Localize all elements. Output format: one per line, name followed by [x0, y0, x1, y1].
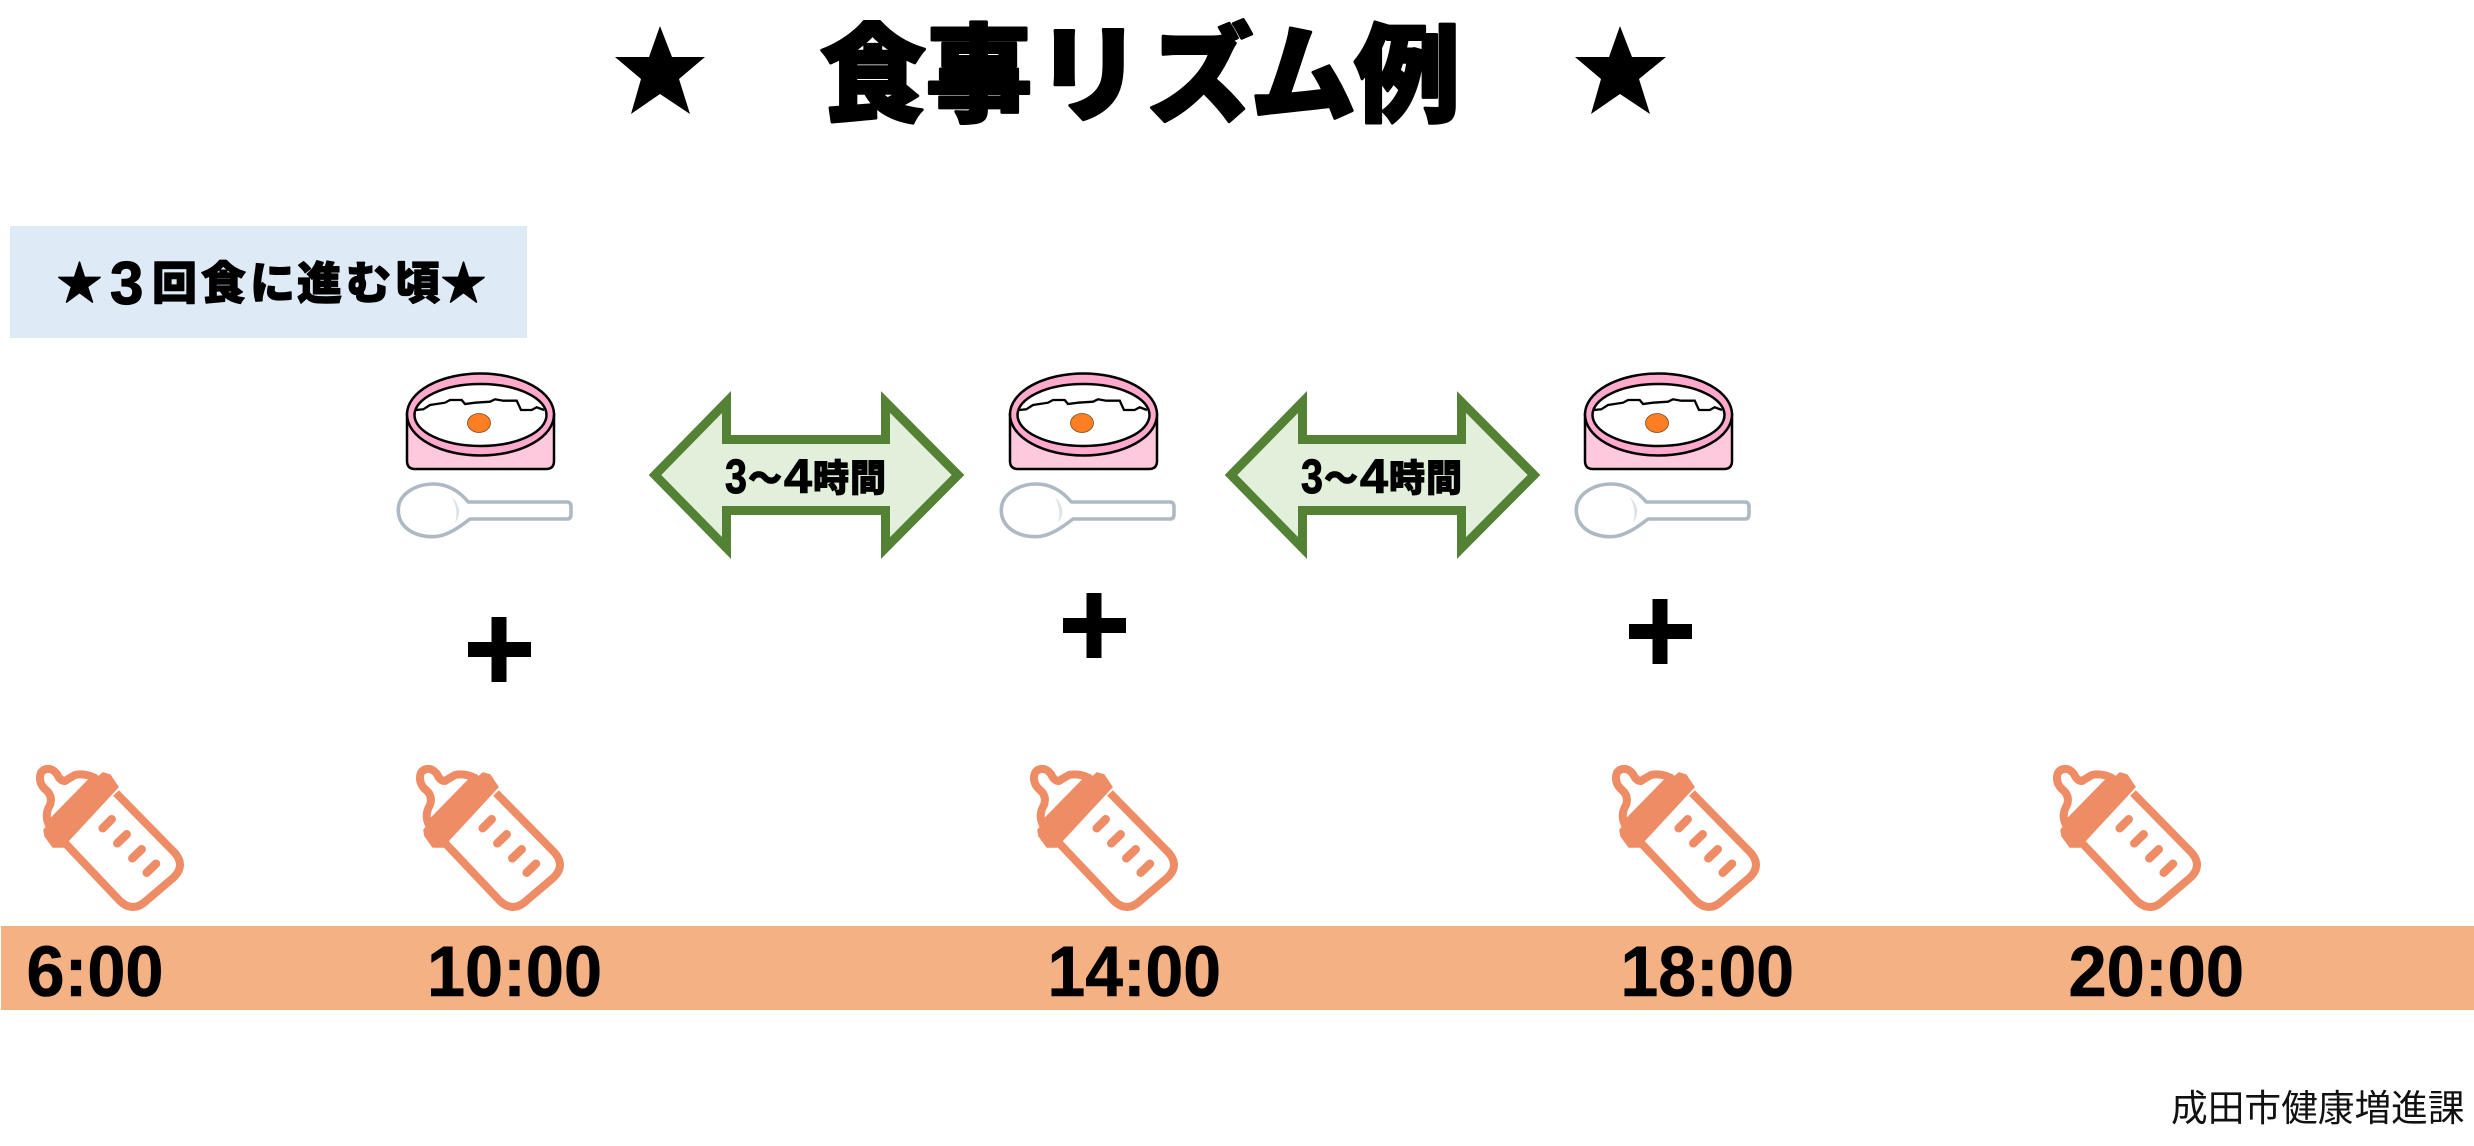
icon: bottle 20:00 [2057, 769, 2197, 907]
meal 2 bowl [1010, 374, 1157, 469]
label text: ★ [57, 258, 102, 309]
meal 1 bowl [407, 374, 554, 469]
time 18:00: 18:00 [1620, 933, 1794, 1012]
plus 3 [1629, 599, 1692, 664]
arrow label: 3 [1301, 451, 1323, 504]
arrow label: 時 [813, 458, 849, 499]
icon: bottle 6:00 [40, 769, 180, 907]
label text: 3 [110, 250, 143, 317]
arrow: 3-4 hours second interval [1231, 402, 1534, 548]
icon: bottle 10:00 [420, 769, 560, 907]
panel: stage label [10, 226, 527, 338]
arrow: 3-4 hours first interval [655, 402, 958, 548]
meal 1 spoon [398, 484, 571, 537]
arrow label: 3 [725, 451, 747, 504]
title text: 食事リズム例 [820, 18, 1460, 136]
arrow label: ～ [748, 458, 782, 499]
arrow label: 4 [784, 451, 812, 504]
time 6:00: 6:00 [26, 933, 164, 1012]
title star right [1575, 26, 1666, 114]
meal 2 spoon [1001, 484, 1174, 537]
meal 3 spoon [1576, 484, 1749, 537]
title star left [615, 26, 705, 114]
meal 3 bowl [1585, 374, 1732, 469]
time 20:00: 20:00 [2068, 933, 2244, 1012]
arrow label [1301, 451, 1462, 504]
plus 1 [468, 617, 531, 682]
time 14:00: 14:00 [1048, 933, 1221, 1012]
arrow label: 間 [1426, 458, 1462, 499]
timeline [1, 926, 2474, 1012]
icon: bottle 18:00 [1616, 769, 1756, 907]
arrow label [725, 451, 886, 504]
title [615, 18, 1666, 136]
plus 2 [1063, 593, 1126, 658]
arrow label: ～ [1324, 458, 1358, 499]
time 10:00: 10:00 [427, 933, 602, 1012]
arrow label: 間 [850, 458, 886, 499]
arrow label: 4 [1360, 451, 1388, 504]
icon: bottle 14:00 [1034, 769, 1174, 907]
arrow label: 時 [1389, 458, 1425, 499]
credit: 成田市健康増進課 [2171, 1088, 2465, 1129]
label text: 回食に進む頃★ [152, 258, 486, 309]
